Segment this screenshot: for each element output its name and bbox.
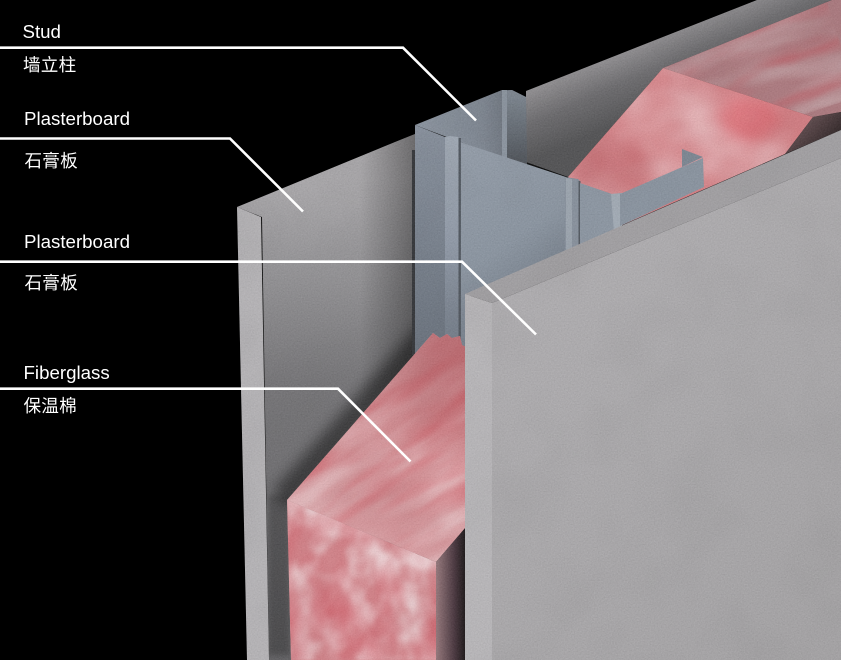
upper fiberglass front face bbox=[568, 68, 813, 226]
label: front plasterboard bbox=[0, 231, 536, 334]
front board edge face bbox=[465, 294, 492, 660]
stud left edge shadow bbox=[412, 150, 415, 355]
back plasterboard bbox=[237, 0, 832, 660]
stud return flange bbox=[620, 158, 704, 226]
stud front flange bbox=[415, 125, 445, 362]
label text: Plasterboard: Plasterboard bbox=[24, 108, 130, 129]
label text: 保温棉: 保温棉 bbox=[24, 396, 77, 416]
label text: Plasterboard: Plasterboard bbox=[24, 231, 130, 252]
lower fiberglass shadowed face bbox=[436, 527, 466, 660]
back board edge face bbox=[237, 207, 269, 660]
stud second rib highlight bbox=[566, 178, 572, 257]
label text: 石膏板: 石膏板 bbox=[24, 151, 78, 171]
stud outer flange bbox=[580, 183, 622, 250]
label text: Fiberglass: Fiberglass bbox=[24, 362, 110, 383]
upper fiberglass shadowed face bbox=[785, 112, 841, 154]
stud lip bbox=[682, 149, 703, 167]
back board inner surface bbox=[237, 130, 430, 660]
label: fiberglass bbox=[0, 362, 410, 462]
lower fiberglass bbox=[287, 333, 465, 660]
steel stud bbox=[412, 90, 704, 362]
leader line: fiberglass bbox=[0, 389, 410, 462]
stud front rib edge bbox=[458, 138, 461, 353]
lower fiberglass top face bbox=[287, 333, 465, 562]
label text: 墙立柱: 墙立柱 bbox=[23, 55, 76, 75]
label text: 石膏板: 石膏板 bbox=[24, 273, 78, 293]
surface grain bbox=[230, 0, 841, 660]
stud rear flange bbox=[507, 90, 527, 165]
front board face bbox=[492, 158, 841, 660]
stud rear channel bbox=[415, 90, 527, 165]
leader line: stud bbox=[0, 48, 476, 121]
leader line: front plasterboard bbox=[0, 262, 536, 334]
stud second rib bbox=[565, 177, 580, 258]
stud corner bend bbox=[611, 193, 622, 232]
upper fiberglass bbox=[568, 0, 841, 226]
leader line: back plasterboard bbox=[0, 138, 303, 212]
front plasterboard bbox=[465, 130, 841, 660]
back board top band and upper surface bbox=[526, 0, 832, 177]
stud front rib bbox=[445, 136, 460, 350]
label text: Stud: Stud bbox=[22, 21, 61, 42]
label: back plasterboard bbox=[0, 108, 303, 212]
upper fiberglass rear face bbox=[663, 0, 841, 117]
stud rear rib bbox=[502, 90, 507, 158]
lower fiberglass front face bbox=[287, 500, 436, 660]
front board top band bbox=[465, 130, 841, 303]
stud web bbox=[460, 142, 566, 352]
label: stud bbox=[0, 21, 476, 120]
stud second rib edge bbox=[578, 181, 580, 247]
